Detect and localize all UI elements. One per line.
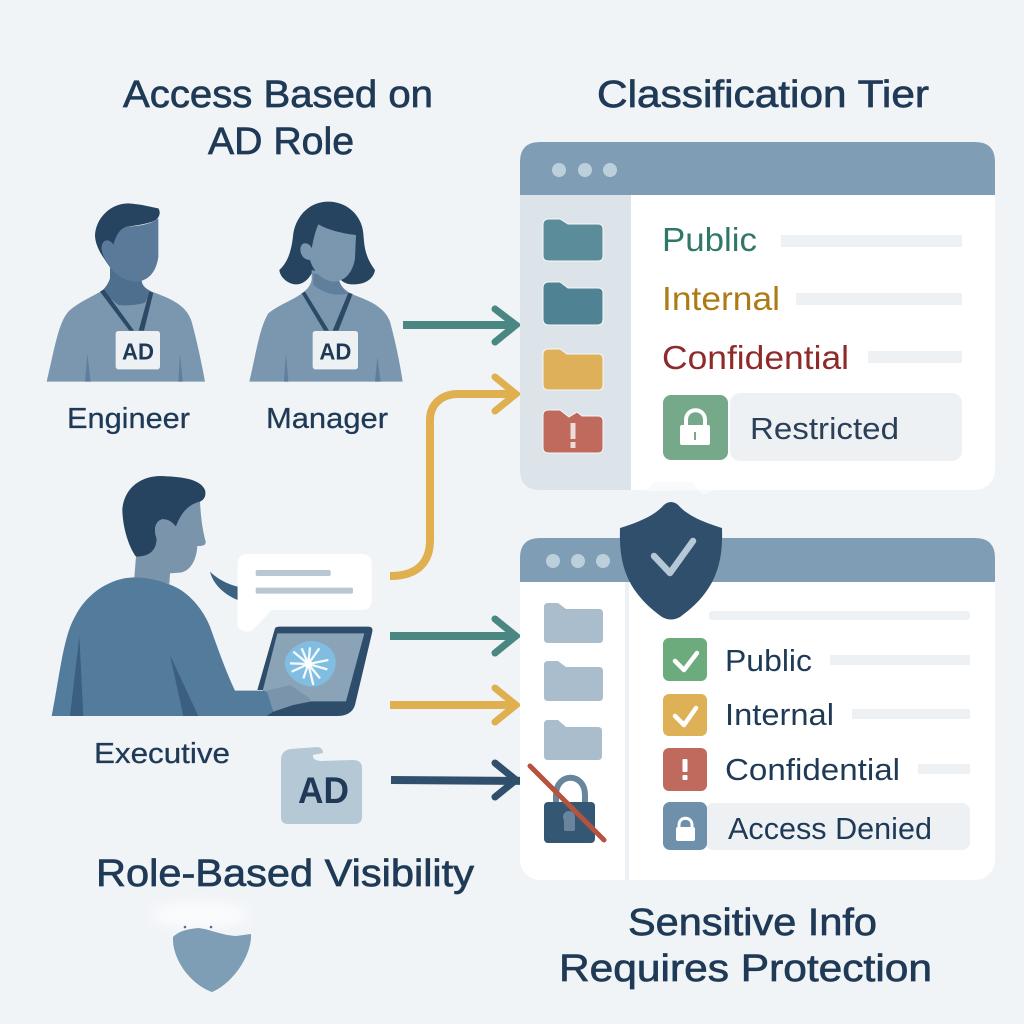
arrow: navy executive to locked folder xyxy=(391,763,536,797)
tier: restricted xyxy=(663,393,962,461)
arrow: yellow executive to internal folder xyxy=(390,688,516,722)
heading: access based on AD role xyxy=(123,74,433,163)
heading: sensitive info requires protection xyxy=(559,902,932,990)
folder: confidential xyxy=(543,349,603,390)
row: public allowed xyxy=(663,638,970,681)
tier: internal: Internal xyxy=(662,280,780,317)
speech bubble xyxy=(210,554,372,632)
row: public allowed: Public xyxy=(725,643,812,678)
figure: engineer: AD xyxy=(122,338,154,364)
figure: engineer xyxy=(47,203,205,382)
figure: executive at laptop xyxy=(52,476,372,716)
row: internal allowed: Internal xyxy=(725,697,834,732)
row: confidential warning: Confidential xyxy=(725,752,900,787)
tier: confidential xyxy=(662,339,962,376)
tier: confidential: Confidential xyxy=(662,339,849,376)
pointer to shield xyxy=(645,482,714,495)
label: executive: Executive xyxy=(94,738,230,770)
panel: role-based view window xyxy=(520,538,995,880)
tier: public: Public xyxy=(662,221,757,258)
icon: faded shield xyxy=(152,903,251,992)
folder: restricted xyxy=(543,410,603,453)
bar above list xyxy=(709,611,970,620)
row: access denied xyxy=(663,802,970,850)
row: access denied: Access Denied xyxy=(728,811,932,846)
arrow: teal executive to public xyxy=(390,619,516,653)
folder: internal xyxy=(543,282,603,325)
heading: classification tier: Classification Tier xyxy=(597,74,929,116)
heading: access based on AD role: AD Role xyxy=(208,121,354,163)
tier: restricted: Restricted xyxy=(750,411,899,446)
tier: internal xyxy=(662,280,962,317)
heading: role-based visibility: Role-Based Visibility xyxy=(96,853,474,895)
icon: AD folder badge: AD xyxy=(298,770,349,811)
icon: AD folder badge xyxy=(281,747,362,824)
arrow: yellow executive to internal xyxy=(390,377,516,576)
figure: manager: AD xyxy=(319,338,351,364)
label: engineer: Engineer xyxy=(67,403,190,435)
arrow: teal manager to classification xyxy=(403,309,516,342)
figure: manager xyxy=(249,202,403,382)
dimmed folder 2 xyxy=(544,661,603,701)
heading: sensitive info requires protection: Requires Protection xyxy=(559,948,932,990)
heading: access based on AD role: Access Based on xyxy=(123,74,433,116)
label: manager: Manager xyxy=(266,403,388,435)
row: internal allowed xyxy=(663,694,970,736)
dimmed folder 1 xyxy=(544,603,603,643)
heading: sensitive info requires protection: Sensitive Info xyxy=(628,902,877,944)
icon: shield with check xyxy=(620,502,722,620)
folder: public xyxy=(543,219,603,261)
dimmed folder 3 xyxy=(544,720,602,760)
panel: classification tier window xyxy=(520,142,995,495)
row: confidential warning xyxy=(663,748,970,791)
tier: public xyxy=(662,221,962,258)
icon: crossed lock xyxy=(530,766,604,843)
